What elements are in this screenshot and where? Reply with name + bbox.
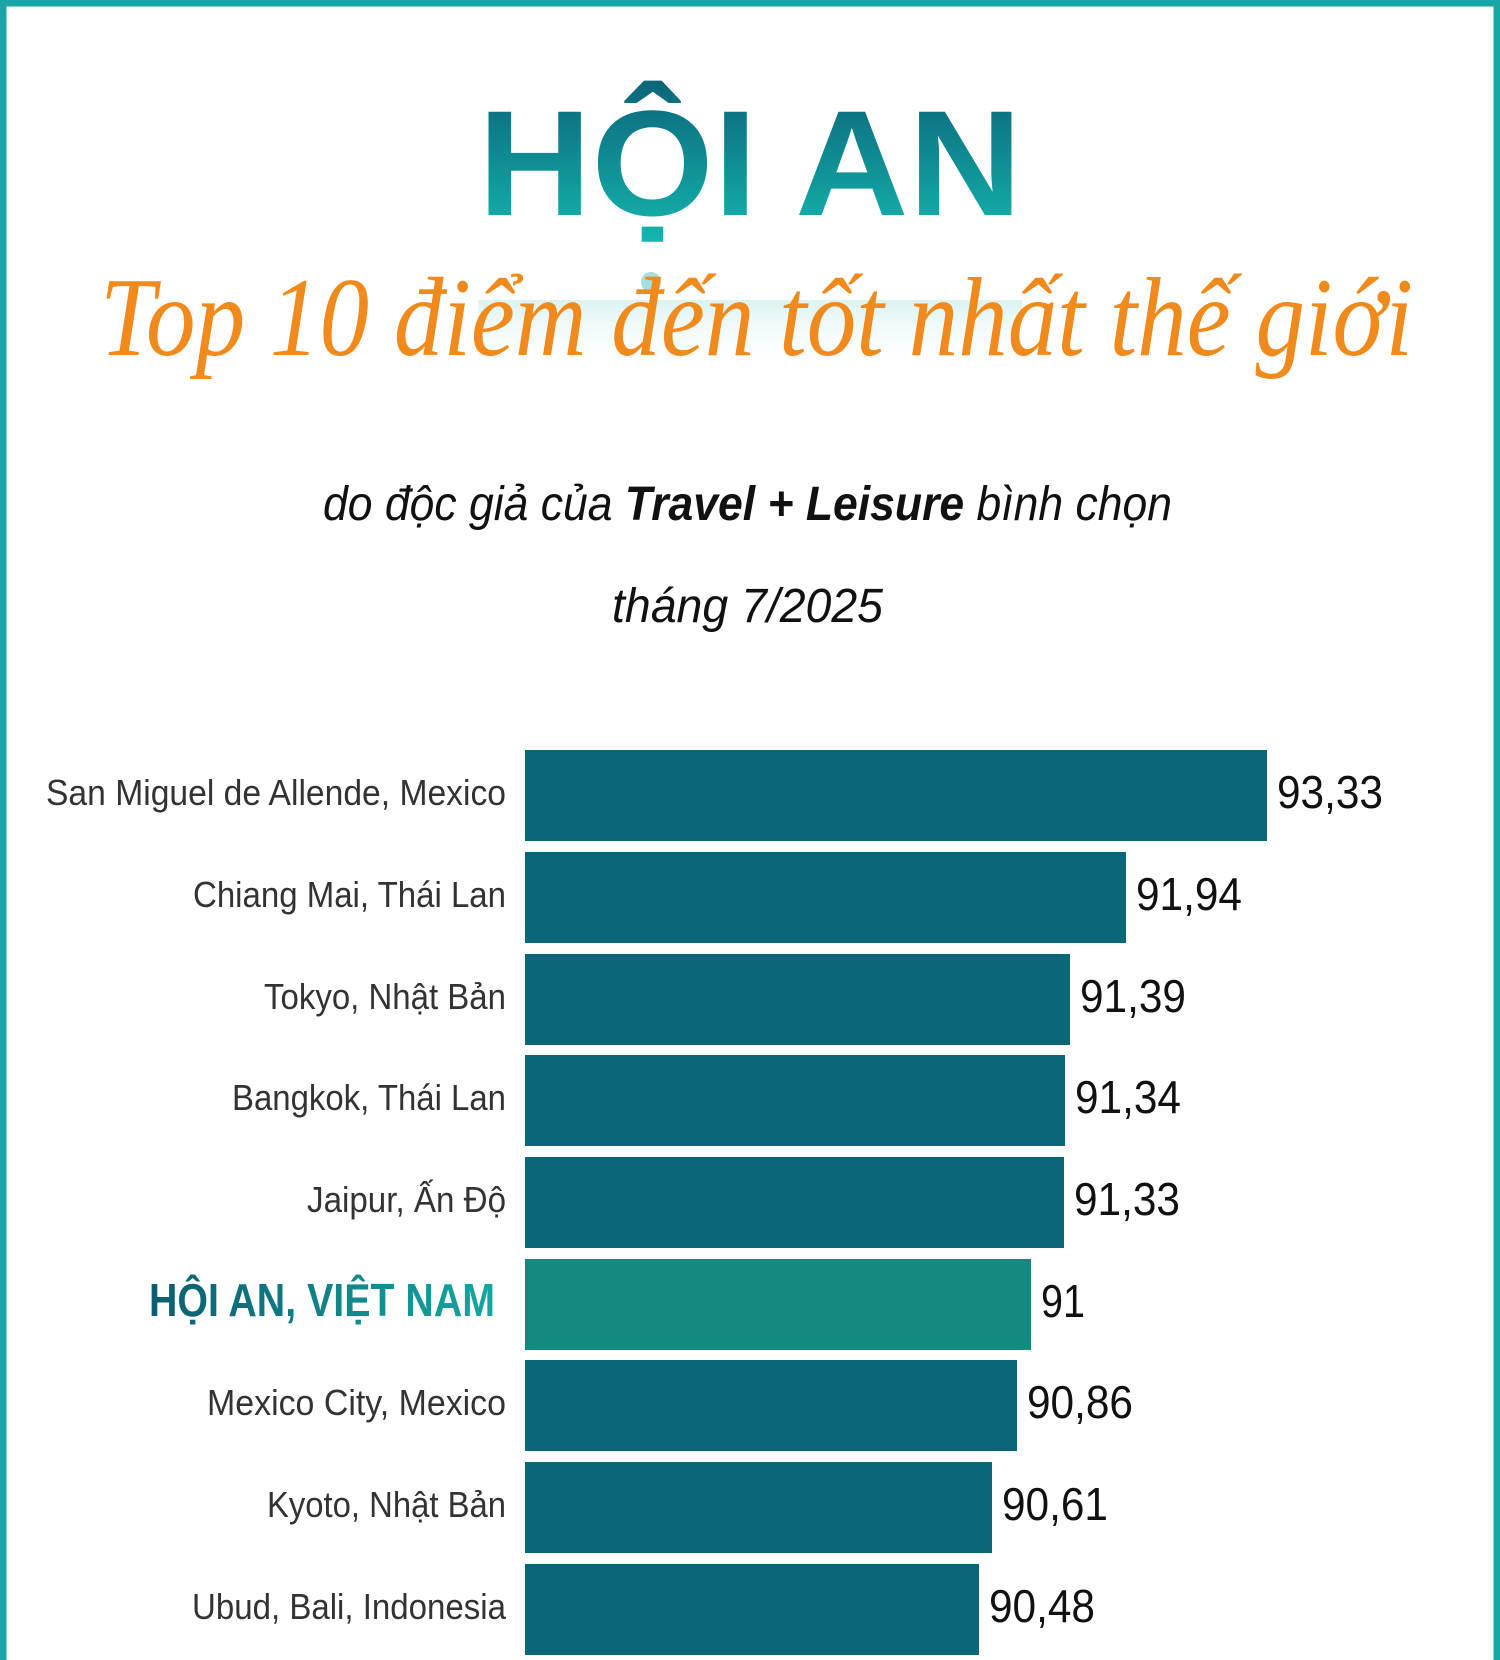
title: HOI AN	[478, 79, 1022, 375]
bar: Kyoto: Kyoto, Nhật Bản	[267, 1484, 506, 1525]
bar: Jaipur: Jaipur, Ấn Độ	[307, 1179, 506, 1220]
bar: Kyoto: 90,61	[1002, 1478, 1108, 1530]
bar: Kyoto	[267, 1462, 1108, 1553]
title: HOI AN: HỘI AN	[478, 79, 1022, 247]
bar: Chiang Mai: Chiang Mai, Thái Lan	[193, 874, 506, 915]
bar chart	[46, 750, 1383, 1655]
bar: Ubud: Ubud, Bali, Indonesia	[192, 1586, 507, 1627]
bar: Bangkok: Bangkok, Thái Lan	[232, 1077, 506, 1118]
bar: San Miguel: 93,33	[1277, 766, 1383, 818]
bar: Ubud	[192, 1564, 1095, 1655]
bar: Bangkok	[232, 1055, 1181, 1146]
bar: Chiang Mai	[193, 852, 1242, 943]
date: tháng 7/2025	[612, 580, 883, 633]
bar: Tokyo: 91,39	[1080, 970, 1186, 1022]
bar: Jaipur	[307, 1157, 1180, 1248]
bar: San Miguel: San Miguel de Allende, Mexico	[46, 772, 506, 813]
reflection	[478, 300, 1022, 375]
bar: Tokyo	[264, 954, 1186, 1045]
bar: Hoi An highlighted	[149, 1259, 1085, 1350]
bar: Hoi An highlighted: 91	[1041, 1275, 1085, 1327]
bar: San Miguel	[46, 750, 1383, 841]
bar: Tokyo: Tokyo, Nhật Bản	[264, 976, 506, 1017]
bar: Bangkok: 91,34	[1075, 1071, 1181, 1123]
bar: Mexico City	[207, 1360, 1133, 1451]
bar: Hoi An highlighted: HỘI AN, VIỆT NAM	[149, 1274, 495, 1326]
bar: Mexico City: 90,86	[1027, 1376, 1133, 1428]
bar: Jaipur: 91,33	[1074, 1173, 1180, 1225]
subtitle line: do độc giả của Travel + Leisure bình chọn	[323, 478, 1172, 531]
bar: Mexico City: Mexico City, Mexico	[207, 1382, 506, 1423]
bar: Chiang Mai: 91,94	[1136, 868, 1242, 920]
bar: Ubud: 90,48	[989, 1580, 1095, 1632]
